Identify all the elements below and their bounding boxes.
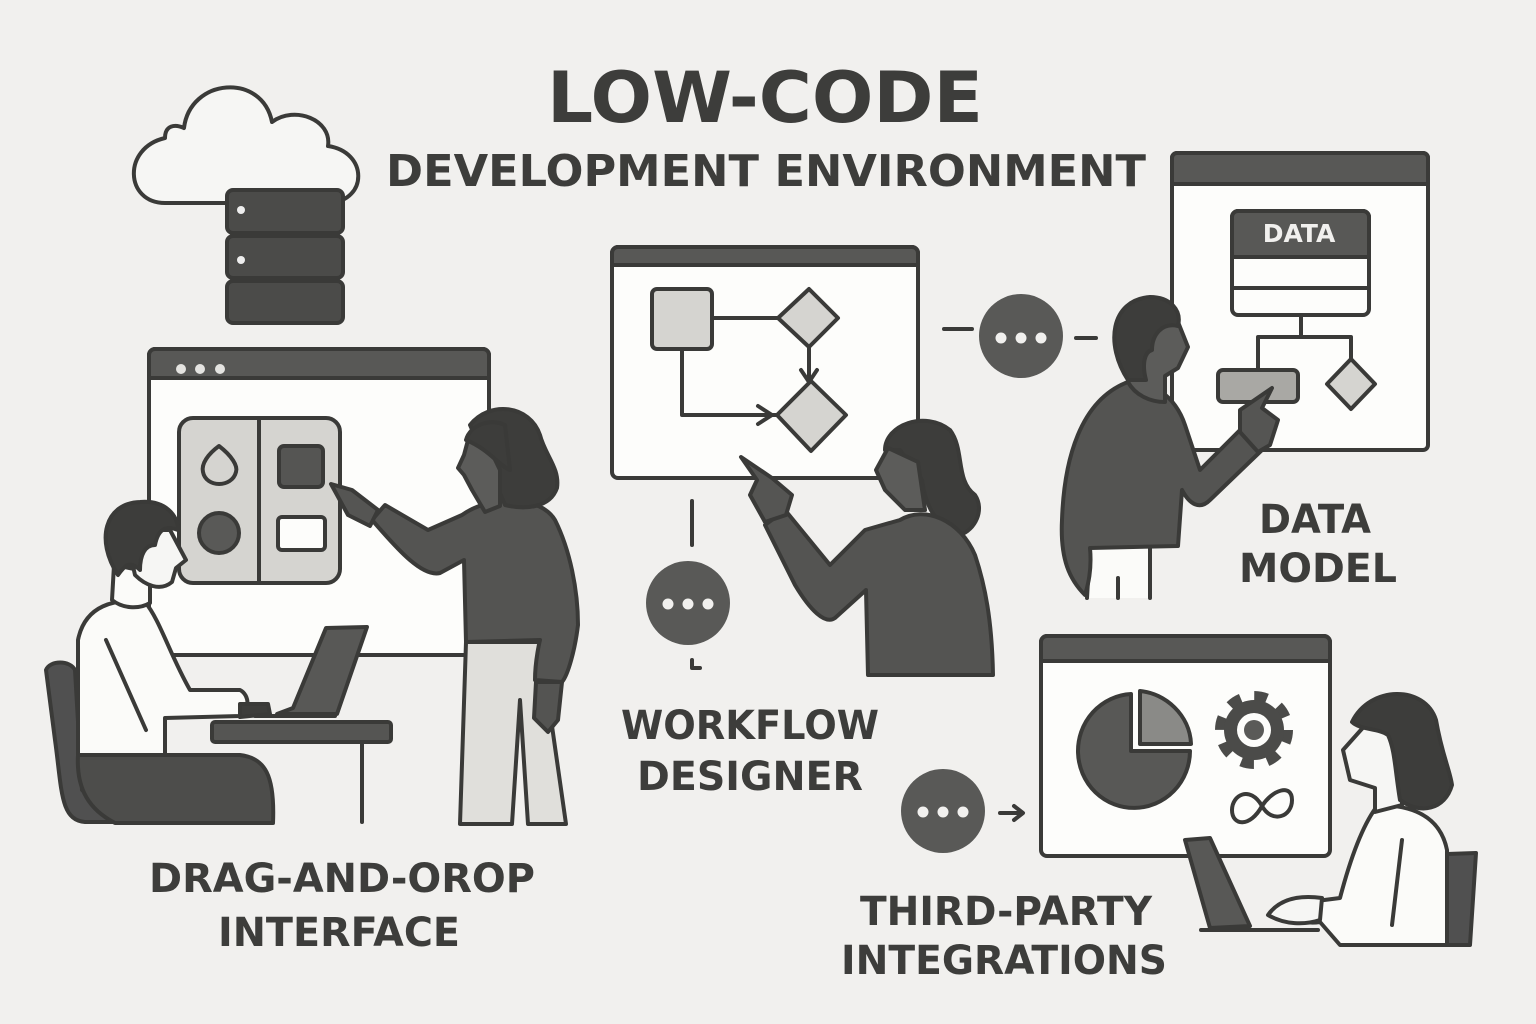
chat bubble with arrow: integrations <box>901 769 1023 853</box>
title <box>386 57 1146 197</box>
icon: infinity loop <box>1232 790 1292 822</box>
figure: woman pointing at workflow <box>741 421 993 675</box>
label: workflow designer: DESIGNER <box>637 754 863 800</box>
flowchart <box>652 289 846 451</box>
label: workflow designer: WORKFLOW <box>621 703 879 749</box>
title: LOW-CODE <box>547 57 983 139</box>
figure: woman with laptop <box>1185 694 1476 945</box>
title: DEVELOPMENT ENVIRONMENT <box>386 146 1146 197</box>
label: drag-and-drop interface: INTERFACE <box>218 910 460 956</box>
panel: workflow window <box>612 247 918 478</box>
data table: DATA <box>1263 219 1336 248</box>
connector and chat bubble: workflow <box>646 501 730 668</box>
label: third-party integrations: INTEGRATIONS <box>841 938 1167 984</box>
label: workflow designer <box>621 703 879 800</box>
label: data model: MODEL <box>1239 546 1397 592</box>
pie chart <box>1078 691 1191 808</box>
panel: data model window <box>1172 153 1428 450</box>
connector and chat bubble: data <box>944 294 1096 378</box>
label: third-party integrations <box>841 889 1167 984</box>
data table <box>1232 211 1369 315</box>
label: data model: DATA <box>1259 497 1371 543</box>
label: data model <box>1239 497 1397 592</box>
figure: man pointing at data <box>1062 297 1278 598</box>
label: drag-and-drop interface: DRAG-AND-OROP <box>149 856 535 902</box>
panel: integrations window <box>1041 636 1330 856</box>
icon: server stack <box>227 190 343 323</box>
figure: seated man with laptop <box>46 502 391 823</box>
icon: gear <box>1220 696 1288 764</box>
figure: standing woman <box>331 409 578 824</box>
label: third-party integrations: THIRD-PARTY <box>860 889 1153 935</box>
icon: cloud <box>134 87 358 203</box>
panel: drag-and-drop window <box>149 349 489 655</box>
label: drag-and-drop interface <box>149 856 535 956</box>
component palette <box>179 418 340 583</box>
